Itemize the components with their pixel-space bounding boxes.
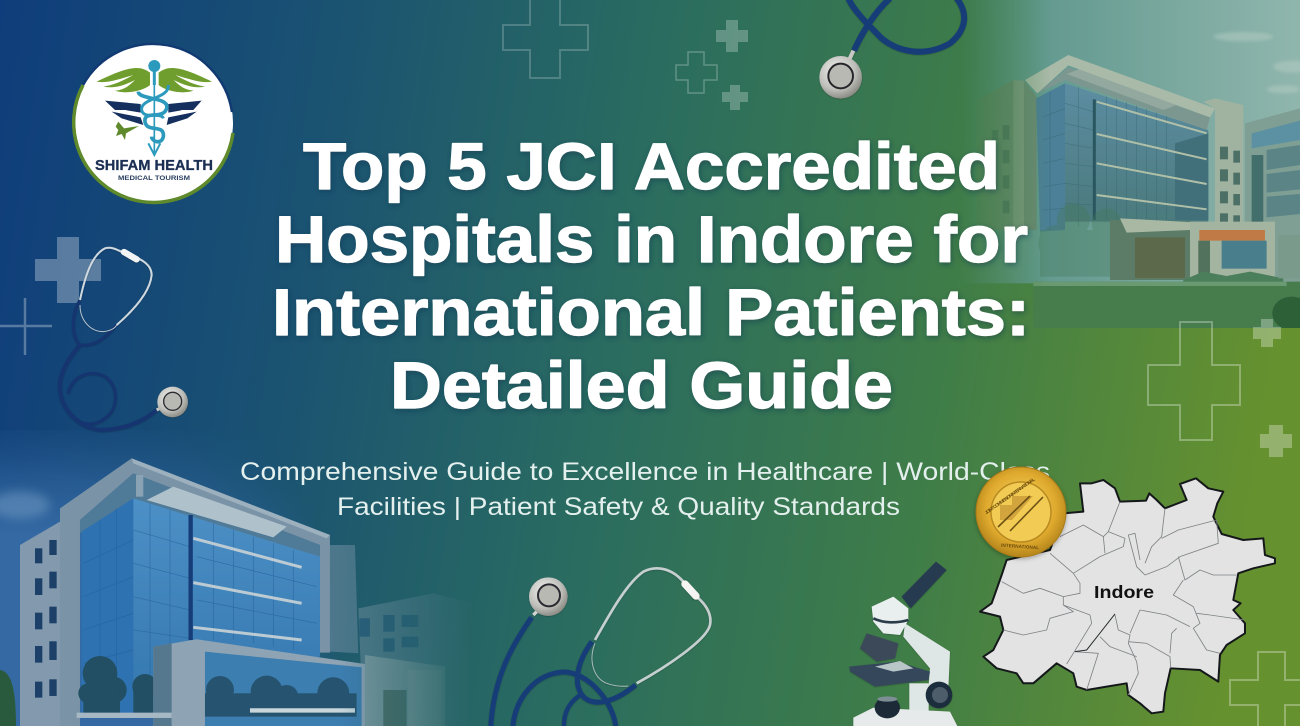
annex <box>365 655 445 726</box>
decorative cross: lower solid <box>722 85 748 110</box>
back building <box>358 593 473 726</box>
concrete frame <box>60 458 330 653</box>
decorative cross: left thin <box>0 298 52 355</box>
Indore district map <box>980 478 1275 713</box>
JCI gold seal: JOINT COMMISSION INTERNATIONAL <box>984 477 1036 515</box>
chest piece <box>157 387 188 417</box>
title: International Patients: <box>272 275 1030 349</box>
entrance canopy <box>1110 220 1190 280</box>
district borders <box>1002 502 1245 695</box>
logo text: SHIFAM HEALTH <box>95 157 213 174</box>
floor bands <box>1097 102 1207 209</box>
title: Detailed Guide <box>390 348 893 422</box>
subtitle <box>240 458 1050 521</box>
glass facade <box>1036 83 1065 232</box>
chest piece <box>819 56 862 99</box>
caduceus <box>138 70 168 155</box>
second building <box>1245 108 1300 283</box>
side block <box>20 522 60 726</box>
right block <box>1203 98 1243 230</box>
JCI gold seal: INTERNATIONAL <box>1001 543 1039 550</box>
logo badge: MEDICAL TOURISM <box>118 175 190 182</box>
subtitle: Comprehensive Guide to Excellence in Healthcare | World-Class <box>240 458 1050 486</box>
map label: Indore <box>1094 582 1154 602</box>
decorative cross: right solid lower <box>1260 425 1292 457</box>
hospital sign <box>1199 230 1265 241</box>
title: Hospitals in Indore for <box>275 202 1028 276</box>
stethoscope: bottom <box>491 568 710 726</box>
JCI gold seal <box>976 467 1066 557</box>
wings <box>97 68 212 92</box>
reflected trees <box>205 676 357 717</box>
decorative cross: right large outline <box>1148 322 1240 440</box>
logo circle <box>73 43 233 203</box>
stethoscope: left <box>60 248 188 430</box>
map outline <box>980 478 1275 713</box>
navy plane wings <box>105 101 202 113</box>
decorative cross: left solid <box>35 237 101 303</box>
floor bands <box>193 538 302 640</box>
chest piece <box>529 577 568 616</box>
entrance canopy <box>153 639 365 726</box>
decorative cross: top centre outline <box>503 0 588 78</box>
logo badge <box>73 43 233 203</box>
hospital photo: bottom left <box>0 458 473 726</box>
glass facade <box>82 498 133 717</box>
plane icon <box>116 122 139 140</box>
microscope icon <box>849 562 957 726</box>
trees in front of glass <box>1038 203 1122 277</box>
title: Top 5 JCI Accredited <box>303 129 1000 203</box>
trees in front of left glass <box>78 656 158 713</box>
louvres <box>147 487 287 537</box>
title <box>272 129 1030 422</box>
roof frame <box>1037 67 1210 130</box>
decorative cross: small outline <box>676 52 717 93</box>
sky <box>972 0 1300 284</box>
left tower <box>995 80 1037 230</box>
decorative cross: right solid upper <box>1253 319 1281 347</box>
sky behind lower hospital <box>0 442 284 726</box>
stethoscope: top <box>819 0 964 99</box>
subtitle: Facilities | Patient Safety & Quality Standards <box>337 493 900 521</box>
lawn <box>1033 282 1300 332</box>
hospital photo: top right <box>972 0 1300 328</box>
decorative cross: small solid <box>716 20 748 52</box>
decorative cross: bottom right outline <box>1230 652 1300 726</box>
recessed roof area <box>80 473 320 563</box>
